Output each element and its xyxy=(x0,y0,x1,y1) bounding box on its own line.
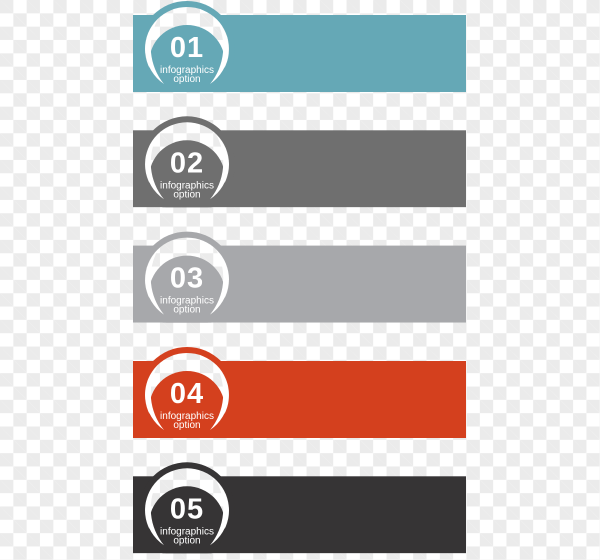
label 04: option xyxy=(173,420,201,431)
label 03 xyxy=(160,263,214,316)
label 01 xyxy=(160,32,214,85)
banner 02 xyxy=(133,116,466,216)
label 02: 02 xyxy=(170,147,204,179)
label 04: 04 xyxy=(170,378,204,410)
label 03: 03 xyxy=(170,263,204,295)
label 05: option xyxy=(173,535,201,546)
icon: crescent arc xyxy=(145,134,229,199)
icon: crescent arc xyxy=(145,480,229,545)
label 03: infographics xyxy=(160,296,214,307)
banner 01 xyxy=(133,1,466,101)
label 05 xyxy=(160,493,214,546)
label 04 xyxy=(160,378,214,431)
banner 03 xyxy=(133,232,466,332)
label 01: infographics xyxy=(160,65,214,76)
banner 04 xyxy=(133,347,466,447)
label 02 xyxy=(160,147,214,200)
icon: crescent arc xyxy=(145,250,229,315)
label 02: infographics xyxy=(160,180,214,191)
banner 05 xyxy=(133,462,466,560)
label 03: option xyxy=(173,305,201,316)
label 01: option xyxy=(173,74,201,85)
label 02: option xyxy=(173,189,201,200)
label 04: infographics xyxy=(160,411,214,422)
label 01: 01 xyxy=(170,32,204,64)
icon: crescent arc xyxy=(145,365,229,430)
label 05: infographics xyxy=(160,526,214,537)
icon: crescent arc xyxy=(145,19,229,84)
label 05: 05 xyxy=(170,493,204,525)
